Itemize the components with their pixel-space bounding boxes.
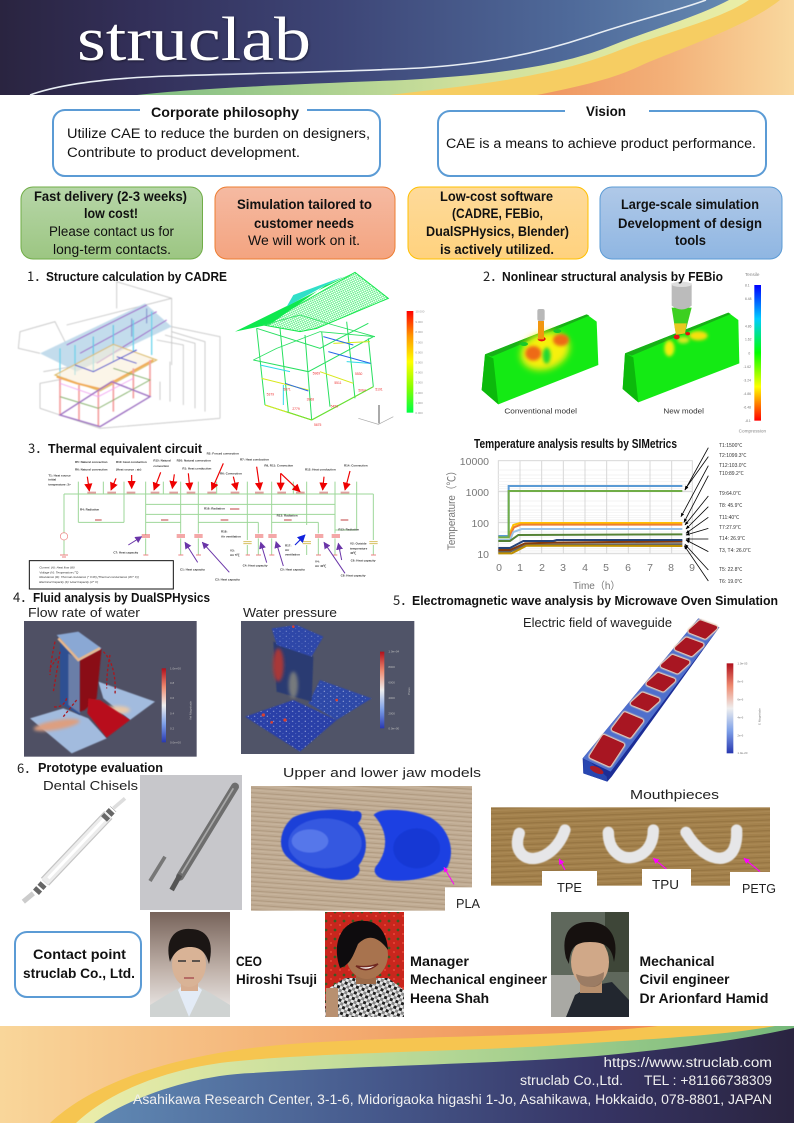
heading: section 1 <box>27 266 227 285</box>
stress colour bar: -6.48 <box>743 406 751 410</box>
chart: thermal equivalent circuit: temperature <box>350 546 368 550</box>
x axis ticks: 8 <box>668 562 674 574</box>
stress colour bar: Tensile <box>745 272 760 277</box>
text: manager: Manager <box>410 954 470 969</box>
chart: waveguide electric field: 4e-6 <box>737 715 744 719</box>
chart: thermal equivalent circuit: R15: Natural <box>153 459 171 463</box>
chart: thermal equivalent circuit: R2: Forced convection <box>207 452 239 456</box>
chart: thermal equivalent circuit: R6: Natural convection <box>75 468 108 472</box>
chart: thermal equivalent circuit: Air <box>285 548 290 552</box>
panel: corporate philosophy: Contribute to product development. <box>67 145 300 160</box>
conventional model <box>482 309 598 404</box>
y axis ticks: 10 <box>477 549 489 561</box>
stress colour bar <box>739 272 767 434</box>
heading: section 5: Electromagnetic wave analysis by Microwave Oven Simulation <box>412 594 778 608</box>
heading: section 3: 3． <box>28 438 48 457</box>
chart: water pressure simulation <box>241 621 414 754</box>
text: manager: Mechanical engineer <box>410 972 548 987</box>
chart: thermal equivalent circuit: R1: Heat conduction <box>182 467 212 471</box>
heading: section 4 <box>13 587 210 606</box>
chart: flow rate simulation: Vel Magnitude <box>189 701 193 720</box>
x axis ticks: 3 <box>560 562 566 574</box>
card: low-cost software: DualSPHysics, Blender) <box>426 224 569 239</box>
stress colour bar: 4.86 <box>745 324 752 328</box>
chart: CADRE stress result: 3968 <box>307 397 314 401</box>
x axis title: Time（h） <box>573 580 620 592</box>
temperature callout labels: T5: 22.8℃ <box>719 567 742 573</box>
chart: water pressure simulation: 4000 <box>388 696 395 700</box>
panel: vision <box>438 104 766 176</box>
chart: waveguide electric field: 6e-6 <box>737 697 744 701</box>
heading: section 2: Nonlinear structural analysis by FEBio <box>502 270 723 284</box>
temperature callout labels: T12:103.0℃ <box>719 463 747 469</box>
chart: CADRE stress result: 5459 <box>331 404 338 408</box>
heading: section 3: Thermal equivalent circuit <box>48 442 203 456</box>
y axis ticks: 1000 <box>466 487 489 499</box>
chart: CADRE stress result: 5379 <box>267 393 274 397</box>
x axis ticks: 2 <box>539 562 545 574</box>
heading: section 1: 1． <box>27 266 47 285</box>
stress colour bar: Compression <box>739 429 767 434</box>
heading: section 6: Prototype evaluation <box>38 761 163 775</box>
chart: thermal equivalent circuit: C8: Heat capacity <box>341 574 366 578</box>
text: mechanical civil engineer: Dr Arionfard Hamid <box>640 991 768 1006</box>
heading: section 4: Fluid analysis by DualSPHysics <box>33 591 210 605</box>
chart: flow rate simulation: 0.6 <box>170 696 174 700</box>
chart: CADRE stress result: 5191 <box>375 387 383 391</box>
x axis ticks: 4 <box>582 562 588 574</box>
temperature callout labels <box>719 443 751 585</box>
card: low-cost software: (CADRE, FEBio, <box>452 206 543 221</box>
heading: section 5 <box>393 590 778 609</box>
chart: water pressure simulation: 6000 <box>388 680 395 684</box>
stress colour bar: -4.86 <box>743 392 751 396</box>
chart: thermal equivalent circuit: C5: Heat capacity <box>280 568 305 572</box>
card: tailored simulation <box>215 187 395 259</box>
card: low-cost software: Low-cost software <box>440 189 553 204</box>
chart: thermal equivalent circuit: V4: <box>315 559 320 563</box>
photo: jaw models <box>251 786 472 911</box>
photo: mouthpieces <box>491 807 770 886</box>
card: large-scale simulation: Large-scale simulation <box>621 197 759 212</box>
x axis ticks <box>496 562 695 574</box>
chart: thermal equivalent circuit: convection <box>153 464 169 468</box>
temperature callout labels: T9:64.0℃ <box>719 491 741 497</box>
chart: waveguide electric field: E Magnitude <box>758 708 762 725</box>
chart: water pressure simulation: 0.0e+00 <box>388 726 400 730</box>
panel: corporate philosophy: Corporate philosophy <box>151 105 300 120</box>
temperature callout labels: T2:1099.3℃ <box>719 453 747 459</box>
photo: manager portrait <box>325 912 404 1017</box>
chart: water pressure simulation: 2000 <box>388 711 395 715</box>
heading: section 2 <box>483 266 723 285</box>
legend box: Electrical Capacity (F): Heat Capacity (J/° C) <box>39 580 98 584</box>
legend box <box>29 561 173 589</box>
chart: CADRE stress result: 9.000 <box>415 320 423 324</box>
upper jaw <box>375 811 450 880</box>
panel: contact point: struclab Co., Ltd. <box>23 966 135 981</box>
legend box: Voltage (V): Temperature (℃) <box>39 570 78 574</box>
card: tailored simulation: Simulation tailored to <box>237 197 372 212</box>
photo: dental chisels <box>140 775 242 910</box>
text: CEO <box>236 954 317 987</box>
chart: CADRE stress result: 5969 <box>313 371 320 375</box>
temperature callout labels: T3, T4: 26.0℃ <box>719 548 751 554</box>
chart: thermal equivalent circuit: C3: Heat capacity <box>215 578 240 582</box>
chart: CADRE stress result: 5871 <box>283 388 291 392</box>
card: tailored simulation: We will work on it. <box>248 233 360 248</box>
chart: flow rate simulation <box>24 621 197 757</box>
chart: thermal equivalent circuit: R4: Radiation <box>80 507 99 511</box>
chart: CADRE stress result: 3.000 <box>415 381 423 385</box>
temperature callout labels: T14: 26.9℃ <box>719 536 745 542</box>
x axis ticks: 7 <box>647 562 653 574</box>
chart: flow rate simulation: 0.4 <box>170 711 174 715</box>
chart: thermal equivalent circuit: Air ventilation <box>221 534 241 538</box>
chart: thermal equivalent circuit: ventilation <box>285 552 300 556</box>
card: low-cost software: is actively utilized. <box>440 242 554 257</box>
chart: CADRE stress result: 7.000 <box>415 340 423 344</box>
label: TPU <box>642 869 691 892</box>
chart: thermal equivalent circuit: V2: Outside <box>350 541 367 545</box>
chart: CADRE stress result: 6.000 <box>415 350 423 354</box>
chart: thermal equivalent circuit: C6: Heat capacity <box>351 559 376 563</box>
x axis ticks: 6 <box>625 562 631 574</box>
chart: thermal equivalent circuit: C4: Heat capacity <box>243 564 268 568</box>
contact details: struclab Co.,Ltd. <box>520 1073 623 1088</box>
chart: temperature analysis results <box>445 437 751 592</box>
chart: CADRE stress result: 1.000 <box>415 401 423 405</box>
text: mechanical civil engineer: Civil engineer <box>640 972 730 987</box>
card: low-cost software <box>408 187 588 259</box>
chart: thermal equivalent circuit: Air 40℃ <box>315 564 326 568</box>
heading: section 4: 4． <box>13 587 33 606</box>
panel: corporate philosophy: Utilize CAE to reduce the burden on designers, <box>67 126 370 141</box>
photo: CEO portrait <box>150 912 230 1017</box>
panel: vision: Vision <box>586 104 626 119</box>
label: PETG <box>730 872 776 896</box>
contact details: https://www.struclab.com <box>604 1055 772 1070</box>
chart: thermal equivalent circuit: R13: Radiation <box>277 514 298 518</box>
chart: CADRE stress result: 4.000 <box>415 371 423 375</box>
chart: CADRE stress result: 5511 <box>334 381 342 385</box>
panel: corporate philosophy <box>53 104 380 176</box>
card: fast delivery <box>21 187 202 259</box>
chart: CADRE stress result: 10.000 <box>415 310 425 314</box>
label: water pressure: Water pressure <box>243 605 337 620</box>
icon: dental chisel drawing <box>23 798 125 902</box>
chart: thermal equivalent circuit <box>29 452 378 589</box>
chart: thermal equivalent circuit: R18: <box>221 530 227 534</box>
card: fast delivery: long-term contacts. <box>53 242 171 257</box>
chart: thermal equivalent circuit: R12: Heat conduction <box>305 468 336 472</box>
heading: section 1: Structure calculation by CADRE <box>46 270 227 284</box>
temperature callout labels: T7:27.9℃ <box>719 525 741 531</box>
chart: thermal equivalent circuit: R10: Heat conduction <box>116 460 147 464</box>
chart: water pressure simulation: 8000 <box>388 665 395 669</box>
stress colour bar: -3.24 <box>743 379 751 383</box>
text: CEO: CEO <box>236 954 262 969</box>
panel: contact point <box>15 932 141 997</box>
chart title: Temperature analysis results by SIMetrics <box>474 437 677 451</box>
temperature callout arrows <box>681 448 708 581</box>
chart: thermal equivalent circuit: initial <box>48 478 56 482</box>
temperature callout labels: T1:1500℃ <box>719 443 742 449</box>
label: mouthpieces: Mouthpieces <box>630 787 720 802</box>
chart: waveguide electric field: 1.0e-20 <box>737 751 748 755</box>
chart: waveguide electric field: 8e-6 <box>737 679 744 683</box>
chart: waveguide electric field: 2e-6 <box>737 733 744 737</box>
chart: CADRE stress result: 2.000 <box>415 391 423 395</box>
label: TPE <box>542 871 597 895</box>
card: fast delivery: Please contact us for <box>49 224 174 239</box>
chart: CADRE stress result: 5.000 <box>415 360 423 364</box>
label: TPU: TPU <box>652 877 679 892</box>
chart: water pressure simulation: Press <box>407 687 411 695</box>
temperature callout labels: T8: 45.9℃ <box>719 503 742 509</box>
chart: CADRE stress result: 2779 <box>292 407 300 411</box>
label: flow rate of water: Flow rate of water <box>28 605 141 620</box>
y axis ticks: 10000 <box>460 456 489 468</box>
chart: flow rate simulation: 0.0e+00 <box>170 741 181 745</box>
card: large-scale simulation: tools <box>675 233 706 248</box>
label: TPE: TPE <box>557 880 582 895</box>
x axis ticks: 5 <box>603 562 609 574</box>
chart: flow rate simulation: 1.0e+00 <box>170 666 181 670</box>
legend box: Resistance (Ω): Thermal resistance (° C/W) [Thermal conductance (W/° C)] <box>39 575 139 579</box>
chart: FEBio results <box>482 272 767 434</box>
label: dental chisels: Dental Chisels <box>43 778 139 793</box>
x axis ticks: 0 <box>496 562 502 574</box>
x axis ticks: 9 <box>689 562 695 574</box>
lower jaw <box>282 811 365 879</box>
panel: contact point: Contact point <box>33 947 127 962</box>
text: mechanical civil engineer <box>640 954 768 1006</box>
contact details: Asahikawa Research Center, 3-1-6, Midorigaoka higashi 1-Jo, Asahikawa, Hokkaido, 078-8801, JAPAN <box>133 1092 772 1107</box>
x axis ticks: 1 <box>517 562 523 574</box>
chart: thermal equivalent circuit: C7: Heat capacity <box>113 551 139 555</box>
heading: section 3 <box>28 438 203 457</box>
chart: thermal equivalent circuit: R7: Heat conduction <box>240 458 269 462</box>
label: PLA: PLA <box>456 896 480 911</box>
chart: thermal equivalent circuit: T1: Heat source <box>48 473 71 477</box>
chart: FEBio results: New model <box>663 406 704 415</box>
chart: thermal equivalent circuit: R6: Convection <box>220 472 242 476</box>
chart: FEBio results: Conventional model <box>504 406 577 415</box>
new model <box>623 282 739 402</box>
chart: water pressure simulation: 1.0e+04 <box>388 650 400 654</box>
y axis ticks: 100 <box>471 518 489 530</box>
photo: mechanical civil engineer portrait <box>551 912 629 1017</box>
card: tailored simulation: customer needs <box>254 216 354 231</box>
heading: section 6: 6． <box>17 758 37 777</box>
chart: thermal equivalent circuit: V3: <box>230 548 235 552</box>
card: fast delivery: Fast delivery (2-3 weeks) <box>34 189 187 204</box>
text: CEO: Hiroshi Tsuji <box>236 972 317 987</box>
heading: section 6 <box>17 758 163 777</box>
temperature callout labels: T11:40℃ <box>719 515 739 521</box>
label box: PLA <box>445 887 472 911</box>
header banner <box>0 0 794 95</box>
chart: thermal equivalent circuit: 40℃ <box>350 551 356 555</box>
heading: section 5: 5． <box>393 590 413 609</box>
chart: CADRE stress result: 5675 <box>314 423 322 427</box>
y axis title: Temperature（℃） <box>445 466 458 550</box>
chart: thermal equivalent circuit: R16: Radiation <box>204 506 225 510</box>
logo: struclab <box>77 6 311 74</box>
chart: flow rate simulation: 0.2 <box>170 726 174 730</box>
label: PETG: PETG <box>742 881 776 896</box>
stress colour bar: -8.1 <box>745 419 751 423</box>
card: large-scale simulation <box>600 187 782 259</box>
chart: thermal equivalent circuit: R13: Radiation <box>338 528 359 532</box>
chart: thermal equivalent circuit: temperature :3> <box>48 482 71 486</box>
stress colour bar: 8.1 <box>745 283 750 287</box>
chart: CADRE stress result: 5064 <box>358 389 366 393</box>
chart: CADRE stress result: 5530 <box>355 372 363 376</box>
heading: section 2: 2． <box>483 266 503 285</box>
chart: thermal equivalent circuit: C1: Heat capacity <box>180 568 205 572</box>
temperature callout labels: T6: 19.0℃ <box>719 579 742 585</box>
contact details <box>133 1055 772 1107</box>
card: fast delivery: low cost! <box>84 206 138 221</box>
text: manager: Heena Shah <box>410 991 489 1006</box>
y axis ticks <box>460 456 489 561</box>
footer banner <box>0 1026 794 1123</box>
chart: waveguide electric field: 1.0e-05 <box>737 661 748 665</box>
chart: thermal equivalent circuit: R20: Natural convection <box>177 459 211 463</box>
contact details: TEL : +81166738309 <box>644 1073 772 1088</box>
chart: waveguide electric field <box>583 618 762 782</box>
chart: CADRE stress result: 0.000 <box>415 411 423 415</box>
card: large-scale simulation: Development of design <box>618 216 762 231</box>
chart: CADRE stress result <box>235 272 425 427</box>
panel: vision: CAE is a means to achieve product performance. <box>446 136 756 151</box>
text: mechanical civil engineer: Mechanical <box>640 954 714 969</box>
chart: thermal equivalent circuit: R9, R11: Convection <box>264 463 293 467</box>
chart: thermal equivalent circuit: Air 5℃ <box>230 553 240 557</box>
stress colour bar: 6.48 <box>745 297 752 301</box>
text: manager <box>410 954 548 1006</box>
stress colour bar: 1.62 <box>745 338 752 342</box>
stress colour bar: -1.62 <box>743 365 751 369</box>
legend box: Current: (A): Heat flow (W) <box>39 566 75 570</box>
chart: thermal equivalent circuit: R14: Convection <box>344 463 368 467</box>
chart: CADRE structural drawing <box>18 282 220 428</box>
label: upper and lower jaw models: Upper and lower jaw models <box>283 765 482 780</box>
chart: thermal equivalent circuit: (Heat source : air) <box>116 468 141 472</box>
chart: thermal equivalent circuit: R5: Natural convection <box>75 460 108 464</box>
temperature callout labels: T10:89.2℃ <box>719 471 744 477</box>
label: electric field of waveguide: Electric field of waveguide <box>523 615 672 630</box>
chart: flow rate simulation: 0.8 <box>170 681 174 685</box>
stress colour bar: 0 <box>748 351 750 355</box>
chart: CADRE stress result: 8.000 <box>415 330 423 334</box>
chart: thermal equivalent circuit: R17: <box>285 544 291 548</box>
